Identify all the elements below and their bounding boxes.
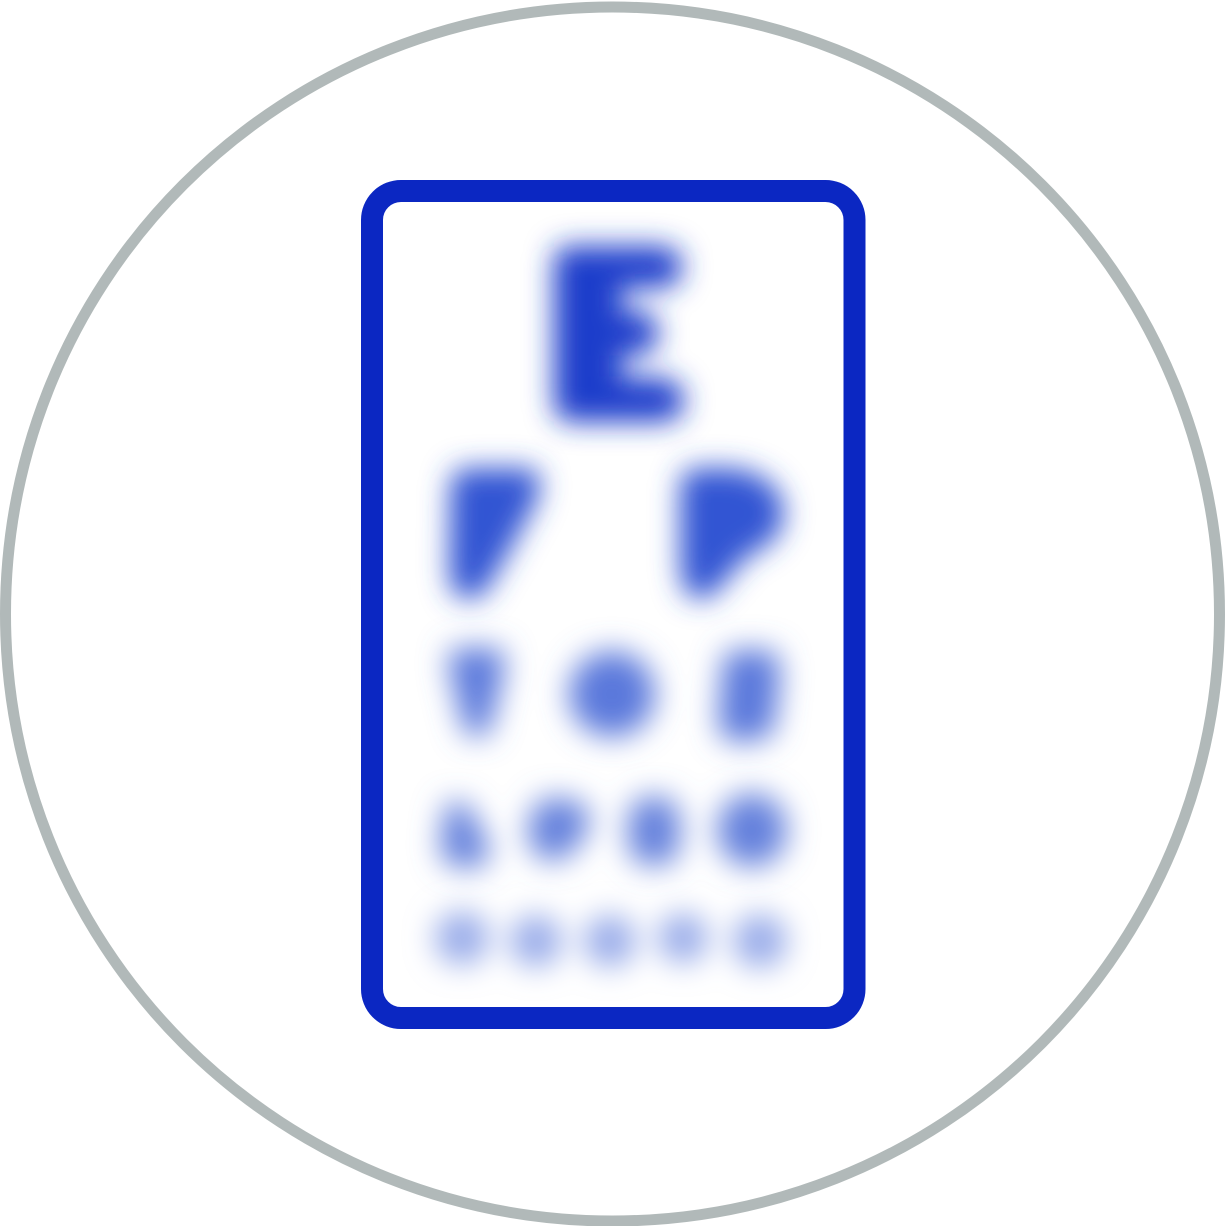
row 4 letter 3	[628, 796, 680, 866]
row 2 left letter	[449, 468, 540, 599]
row 4 letter 2	[528, 798, 590, 862]
row 2 right letter	[680, 468, 784, 599]
row 5 dots	[435, 911, 489, 965]
row 4 letter 4	[717, 793, 787, 867]
row 3 left letter	[449, 648, 505, 738]
row 3 right letter	[718, 650, 780, 742]
row 4 letter 1	[440, 801, 490, 868]
chart row 4: four letters	[440, 793, 787, 868]
chart row 5: five letters	[435, 911, 787, 968]
row 3 middle letter	[569, 651, 655, 737]
chart row 3: three letters	[449, 648, 780, 742]
chart row 2: two letters	[449, 468, 784, 599]
chart frame	[372, 191, 854, 1018]
chart row 1: letter E	[554, 246, 684, 422]
